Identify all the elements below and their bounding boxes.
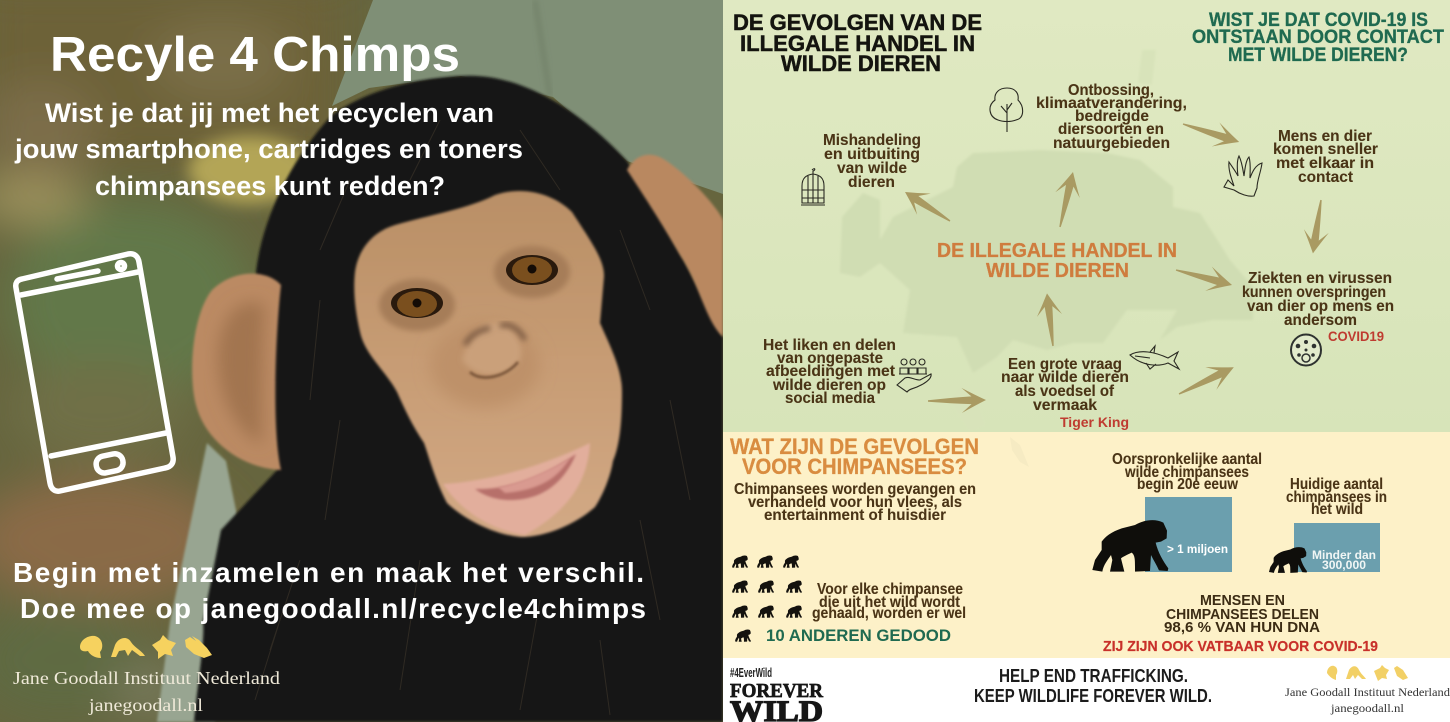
text: current number label: Huidige aantal [1290, 476, 1383, 493]
icon: virus [1291, 334, 1321, 366]
text: original number label: begin 20e eeuw [1137, 476, 1239, 493]
text: current number label [1286, 476, 1387, 518]
text: original number label: Oorspronkelijke aantal [1112, 451, 1262, 468]
heading: central illegal trade label: WILDE DIEREN [986, 260, 1129, 282]
text: original number label [1112, 451, 1262, 493]
text: human animal contact: Mens en dier [1278, 128, 1372, 145]
text: social media: van ongepaste [777, 350, 883, 367]
call to action: Begin met inzamelen en maak het verschil. [13, 557, 644, 588]
text: abuse: Mishandeling [823, 132, 921, 149]
text: social media: afbeeldingen met [766, 363, 895, 380]
logo text: institute name: Jane Goodall Instituut Nederland [13, 668, 280, 688]
heading: consequences of the illegal trade: DE GEVOLGEN VAN DE [733, 10, 982, 35]
chart: original population bar: > 1 miljoen [1167, 542, 1228, 556]
icon: hand [1224, 156, 1262, 196]
heading: consequences of the illegal trade: WILDE DIEREN [781, 51, 941, 76]
heading: central illegal trade label [937, 240, 1177, 282]
icons: rows of small chimpanzees [732, 555, 802, 642]
photo: chimpanzee held by a caretaker [0, 0, 723, 722]
panel: consequences for chimpanzees [723, 432, 1450, 659]
heading: consequences for chimpanzees [730, 434, 979, 479]
callout: also susceptible to COVID-19: ZIJ ZIJN OOK VATBAAR VOOR COVID-19 [1103, 638, 1378, 655]
heading: central illegal trade label: DE ILLEGALE HANDEL IN [937, 240, 1177, 262]
footer: Forever Wild logo: FOREVER [730, 680, 824, 702]
text: for every chimpanzee: die uit het wild wordt [819, 594, 960, 611]
text: diseases and viruses: van dier op mens en [1247, 298, 1394, 315]
text block: question about recycling: jouw smartphone, cartridges en toners [14, 134, 523, 164]
chart: current population bar: 300,000 [1322, 558, 1366, 572]
text: chimpanzees captured: verhandeld voor hun vlees, als [748, 494, 962, 511]
text: demand for wild animals: Een grote vraag [1008, 356, 1122, 373]
heading: consequences of the illegal trade [733, 10, 982, 76]
text: diseases and viruses [1242, 270, 1394, 329]
icon: people in hand [897, 359, 931, 392]
text: social media [763, 337, 896, 407]
icon: tree [990, 88, 1023, 132]
text: abuse [823, 132, 921, 191]
text: deforestation [1036, 82, 1187, 152]
text: for every chimpanzee: gehaald, worden er wel [812, 605, 966, 622]
panel: footer [723, 658, 1450, 722]
text: abuse: van wilde [837, 160, 907, 177]
heading: did you know COVID-19 [1192, 10, 1444, 66]
chart: original population bar [1092, 497, 1232, 572]
call to action: Doe mee op janegoodall.nl/recycle4chimps [20, 593, 646, 624]
footer: hashtag: #4EverWild [730, 665, 772, 680]
text: diseases and viruses: Ziekten en virussen [1248, 270, 1392, 287]
label: Tiger King: Tiger King [1060, 414, 1129, 430]
text: demand for wild animals: naar wilde dieren [1001, 369, 1129, 386]
text: current number label: chimpansees in [1286, 489, 1387, 506]
chart: current population bar: Minder dan [1312, 548, 1376, 562]
map: Asia background [840, 50, 1253, 432]
footer: slogan: KEEP WILDLIFE FOREVER WILD. [974, 686, 1212, 706]
heading: did you know COVID-19: WIST JE DAT COVID-19 IS [1209, 10, 1428, 31]
text: original number label: wilde chimpansees [1124, 464, 1249, 481]
icon: smartphone [16, 254, 173, 491]
text: social media: Het liken en delen [763, 337, 896, 354]
text: current number label: het wild [1311, 501, 1363, 518]
text: shared DNA: CHIMPANSEES DELEN [1166, 606, 1319, 623]
text: shared DNA: MENSEN EN [1200, 592, 1285, 609]
heading: did you know COVID-19: ONTSTAAN DOOR CONTACT [1192, 27, 1444, 48]
footer: slogan: HELP END TRAFFICKING. [999, 666, 1188, 686]
text: shared DNA [1164, 592, 1320, 636]
text: human animal contact: contact [1298, 169, 1353, 186]
text: demand for wild animals: als voedsel of [1015, 383, 1115, 400]
panel: illegal wildlife trade consequences [723, 0, 1450, 433]
text: diseases and viruses: kunnen overspringen [1242, 284, 1386, 301]
label: COVID19: COVID19 [1328, 328, 1384, 344]
logo text: website: janegoodall.nl [88, 695, 203, 715]
callout: 10 others killed: 10 ANDEREN GEDOOD [766, 626, 951, 645]
chart: current population bar [1269, 523, 1380, 573]
text block: question about recycling [14, 98, 523, 201]
text: deforestation: klimaatverandering, [1036, 95, 1187, 112]
heading: consequences for chimpanzees: VOOR CHIMPANSEES? [742, 454, 967, 479]
heading: did you know COVID-19: MET WILDE DIEREN? [1228, 45, 1408, 66]
text: social media: social media [785, 390, 875, 407]
text: for every chimpanzee [812, 581, 966, 622]
footer: slogan [974, 666, 1212, 706]
text: human animal contact [1273, 128, 1378, 186]
text: chimpanzees captured: entertainment of huisdier [764, 507, 946, 524]
footer: Forever Wild logo [730, 680, 824, 722]
text: deforestation: natuurgebieden [1053, 135, 1170, 152]
title: Recyle 4 Chimps: Recyle 4 Chimps [50, 28, 460, 82]
icon: bird cage [801, 169, 825, 205]
icons: Jane Goodall logo marks [80, 635, 212, 659]
text: chimpanzees captured: Chimpansees worden gevangen en [734, 481, 976, 498]
text: chimpanzees captured [734, 481, 976, 524]
arrows: cycle of consequences [898, 112, 1333, 414]
text: abuse: dieren [848, 174, 895, 191]
text block: question about recycling: Wist je dat jij met het recyclen van [45, 98, 494, 128]
footer: institute name: Jane Goodall Instituut Nederland [1285, 685, 1450, 699]
footer: website: janegoodall.nl [1330, 701, 1405, 715]
text: social media: wilde dieren op [772, 377, 886, 394]
icon: shark [1130, 346, 1179, 369]
text: demand for wild animals [1001, 356, 1129, 414]
text block: question about recycling: chimpansees kunt redden? [95, 171, 445, 201]
heading: consequences for chimpanzees: WAT ZIJN DE GEVOLGEN [730, 434, 979, 459]
text: deforestation: diersoorten en [1058, 121, 1164, 138]
footer: Jane Goodall logo icons [1327, 665, 1408, 681]
heading: consequences of the illegal trade: ILLEGALE HANDEL IN [740, 31, 975, 56]
call to action [13, 557, 646, 624]
text: shared DNA: 98,6 % VAN HUN DNA [1164, 619, 1320, 636]
text: human animal contact: met elkaar in [1276, 155, 1374, 172]
text: human animal contact: komen sneller [1273, 141, 1378, 158]
text: abuse: en uitbuiting [824, 146, 920, 163]
text: diseases and viruses: andersom [1284, 312, 1357, 329]
text: demand for wild animals: vermaak [1033, 397, 1097, 414]
text: for every chimpanzee: Voor elke chimpansee [817, 581, 963, 598]
text: deforestation: Ontbossing, [1068, 82, 1154, 99]
text: deforestation: bedreigde [1075, 108, 1149, 125]
